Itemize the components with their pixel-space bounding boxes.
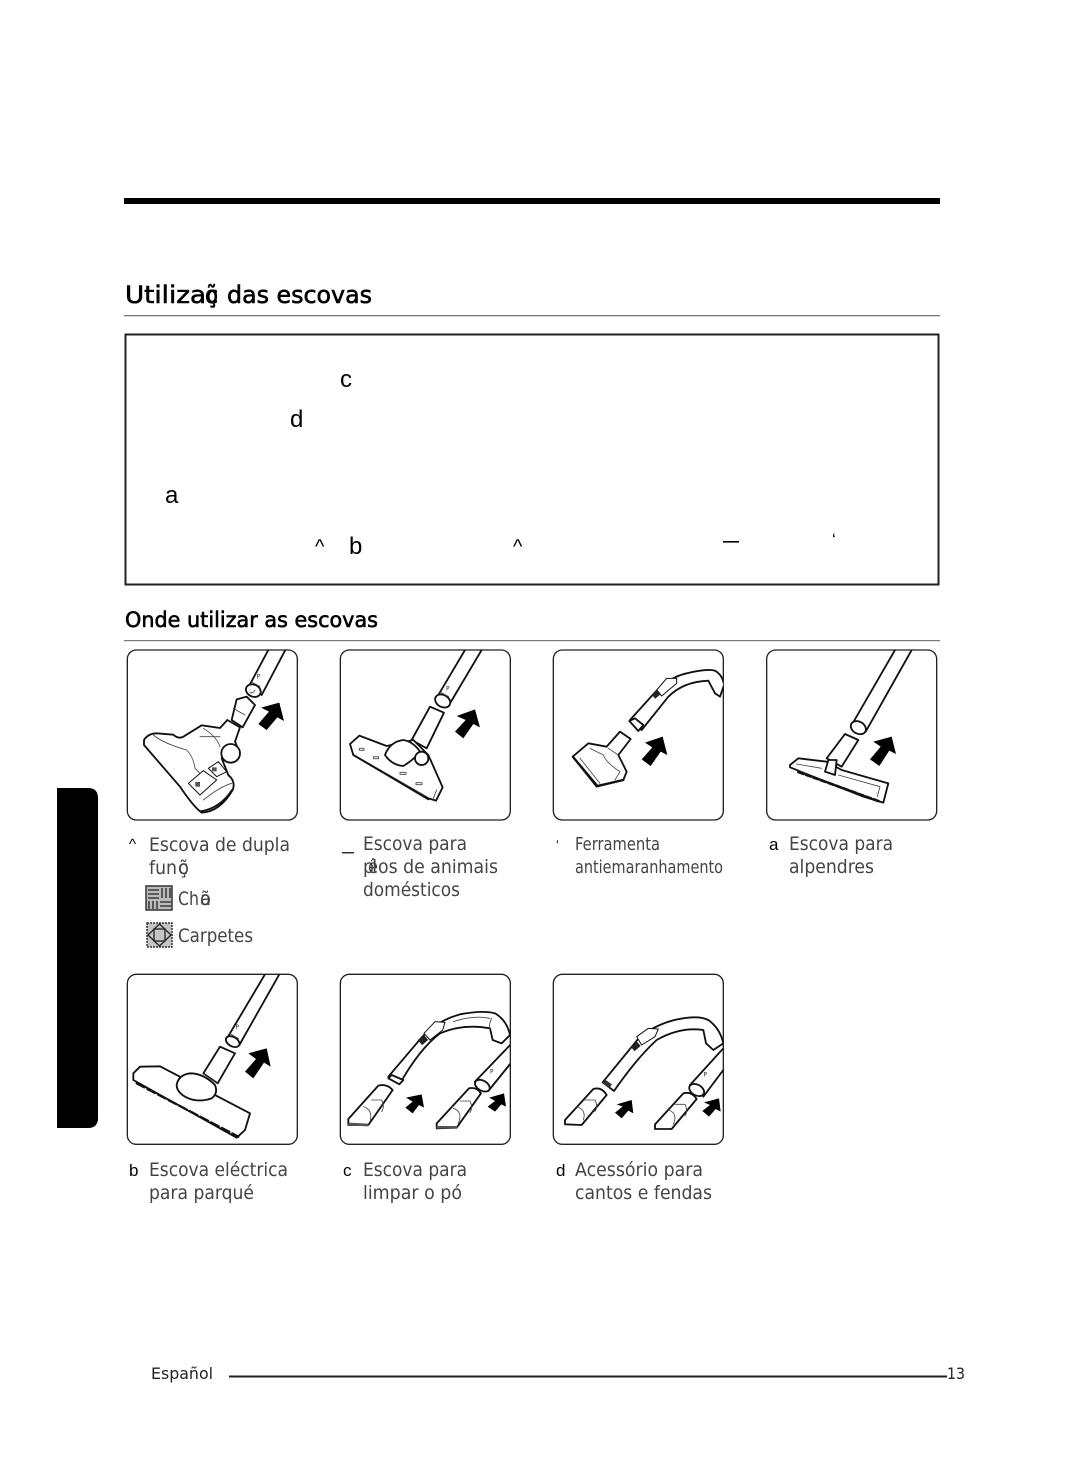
caption: anti-tangle tool: antiemaranhamento: [575, 857, 723, 878]
title: [125, 281, 372, 309]
caption: crevice tool: [556, 1159, 712, 1204]
note box with stray letters: c: [340, 366, 352, 393]
panel: crevice tool: P: [703, 1072, 707, 1079]
caption: electric parquet brush: para parqué: [149, 1182, 254, 1204]
label: carpets: Carpetes: [178, 925, 253, 947]
caption: dual function brush: ç: [178, 857, 188, 879]
caption: crevice tool: d: [556, 1161, 565, 1180]
panel: anti-tangle tool: [553, 650, 724, 820]
top heavy rule: [124, 198, 940, 204]
panel: dual function brush: P: [257, 674, 261, 681]
footer: Español: [151, 1364, 213, 1383]
caption: dusting brush: Escova para: [363, 1159, 467, 1181]
caption: dual function brush: fun: [149, 857, 177, 879]
caption: crevice tool: cantos e fendas: [575, 1182, 712, 1204]
icon: carpet: [147, 923, 172, 947]
label: floor: ã: [200, 888, 211, 910]
footer: 13: [947, 1364, 965, 1383]
caption: pet hair brush: os de animais: [378, 856, 498, 878]
caption: dusting brush: c: [343, 1161, 352, 1180]
note box with stray letters: ^: [315, 536, 325, 558]
caption: porch brush: [769, 833, 893, 878]
panel: crevice tool: [553, 974, 723, 1144]
caption: pet hair brush: l: [372, 856, 377, 878]
caption: porch brush: Escova para: [789, 833, 893, 855]
panel: electric parquet brush: P: [235, 1024, 239, 1031]
caption: pet hair brush: domésticos: [363, 879, 460, 901]
caption: anti-tangle tool: [556, 834, 723, 878]
caption: electric parquet brush: b: [129, 1161, 138, 1180]
title: ç: [206, 281, 218, 309]
side tab: [57, 788, 98, 1128]
note box with stray letters: ^: [513, 536, 523, 558]
caption: dual function brush: [129, 834, 290, 879]
title: das escovas: [227, 281, 372, 309]
caption: anti-tangle tool: Ferramenta: [575, 834, 660, 855]
panel: dusting brush: [340, 974, 513, 1144]
note box with stray letters: [126, 334, 938, 584]
label: floor: Ch: [178, 888, 199, 910]
caption: dual function brush: ^: [129, 836, 136, 853]
icon: floor: [146, 886, 172, 910]
caption: pet hair brush: ê: [368, 856, 378, 878]
subheading: Onde utilizar as escovas: [125, 608, 378, 632]
caption: dusting brush: [343, 1159, 467, 1204]
caption: dusting brush: limpar o pó: [363, 1182, 462, 1204]
caption: porch brush: a: [769, 835, 779, 854]
panel: porch brush: [767, 650, 937, 820]
panel: pet hair brush: P: [446, 686, 450, 693]
note box with stray letters: a: [165, 482, 179, 509]
caption: dual function brush: Escova de dupla: [149, 834, 290, 856]
caption: electric parquet brush: Escova eléctrica: [149, 1159, 288, 1181]
caption: anti-tangle tool: ‘: [556, 837, 559, 852]
caption: dual function brush: õ: [178, 857, 189, 879]
panel: pet hair brush: [340, 650, 510, 820]
title: Utiliza: [125, 281, 206, 309]
note box with stray letters: d: [290, 406, 303, 433]
caption: pet hair brush: p: [363, 856, 374, 878]
caption: pet hair brush: [342, 833, 498, 901]
caption: crevice tool: Acessório para: [575, 1159, 703, 1181]
note box with stray letters: b: [349, 533, 362, 560]
caption: electric parquet brush: [129, 1159, 288, 1204]
panel: dusting brush: P: [490, 1068, 494, 1075]
label: floor: o: [200, 888, 211, 910]
caption: porch brush: alpendres: [789, 856, 874, 878]
panel: electric parquet brush: [127, 974, 297, 1144]
panel: dual function brush: [127, 650, 297, 820]
title: õ: [205, 281, 218, 309]
footer: [151, 1364, 965, 1383]
caption: pet hair brush: Escova para: [363, 833, 467, 855]
note box with stray letters: ‘: [832, 530, 836, 549]
